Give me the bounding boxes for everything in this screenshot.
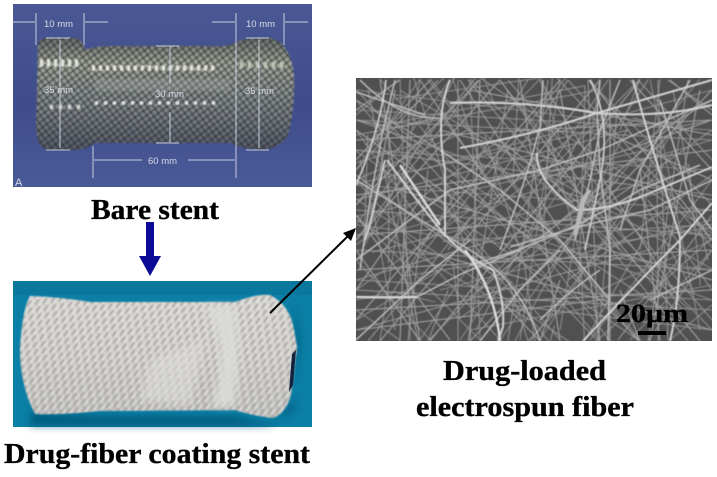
bright thick fibers [356, 80, 712, 341]
arrow: coated stent to fiber micrograph [270, 228, 356, 313]
scale bar [638, 331, 666, 335]
heading: bare stent: Bare stent [91, 194, 219, 226]
coated stent body [20, 295, 297, 418]
thin background fibers [356, 78, 712, 341]
dimension labels: 10 mm [44, 19, 73, 30]
arrow: bare stent to coated stent [139, 222, 161, 276]
dimension labels: 10 mm [246, 19, 275, 30]
panel: electrospun fiber micrograph [356, 78, 712, 341]
heading: drug-fiber coating stent: Drug-fiber coating stent [4, 438, 310, 470]
panel: bare stent photo [13, 4, 312, 189]
stent body with mesh [36, 38, 294, 150]
caption: drug-loaded electrospun fiber: electrospun fiber [416, 391, 634, 423]
dimension labels: 30 mm [155, 89, 184, 100]
dimension labels: A [15, 177, 23, 189]
mid fibers [356, 80, 712, 341]
dimension labels: 35 mm [44, 85, 73, 96]
panel: drug-fiber coated stent photo [13, 281, 312, 427]
dimension labels [15, 19, 275, 189]
dimension lines [13, 13, 308, 178]
caption: drug-loaded electrospun fiber [416, 355, 634, 423]
dimension labels: 35 mm [245, 86, 274, 97]
dimension labels: 60 mm [148, 156, 177, 167]
scale label: 20µm [616, 299, 688, 328]
caption: drug-loaded electrospun fiber: Drug-loaded [443, 355, 606, 387]
